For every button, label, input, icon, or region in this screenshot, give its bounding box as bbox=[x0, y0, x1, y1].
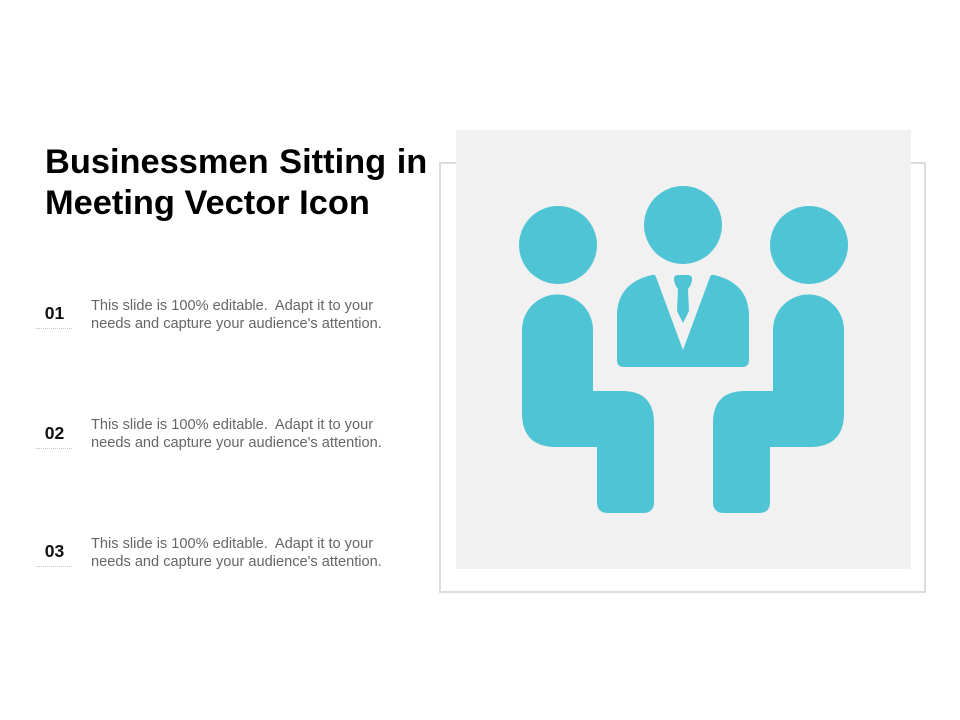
left person body bbox=[522, 294, 654, 513]
item 01 text bbox=[91, 298, 382, 332]
item 02 text bbox=[91, 417, 382, 451]
right person body bbox=[713, 294, 844, 513]
panel background bbox=[456, 130, 911, 569]
title: Meeting Vector Icon bbox=[45, 184, 370, 222]
item 01 text: This slide is 100% editable. Adapt it to your bbox=[91, 298, 373, 314]
item 03 text: This slide is 100% editable. Adapt it to your bbox=[91, 536, 373, 552]
item 03 number: 03 bbox=[45, 541, 64, 561]
centre person tie bbox=[674, 275, 692, 323]
title: Businessmen Sitting in bbox=[45, 143, 427, 181]
item 02 number: 02 bbox=[45, 423, 64, 443]
icon: businessmen meeting bbox=[519, 186, 848, 513]
panel frame bbox=[440, 163, 925, 592]
item 03 text: needs and capture your audience's attention. bbox=[91, 554, 382, 570]
title bbox=[45, 143, 427, 222]
left person head bbox=[519, 206, 597, 284]
item 03 text bbox=[91, 536, 382, 570]
right person head bbox=[770, 206, 848, 284]
item 01 text: needs and capture your audience's attention. bbox=[91, 316, 382, 332]
centre person suit bbox=[617, 275, 749, 367]
item 01 number bbox=[36, 293, 72, 329]
centre person head bbox=[644, 186, 722, 264]
item 02 text: This slide is 100% editable. Adapt it to your bbox=[91, 417, 373, 433]
item 02 text: needs and capture your audience's attention. bbox=[91, 435, 382, 451]
item 02 number bbox=[36, 413, 72, 449]
item 03 number bbox=[36, 531, 72, 567]
item 01 number: 01 bbox=[45, 303, 64, 323]
